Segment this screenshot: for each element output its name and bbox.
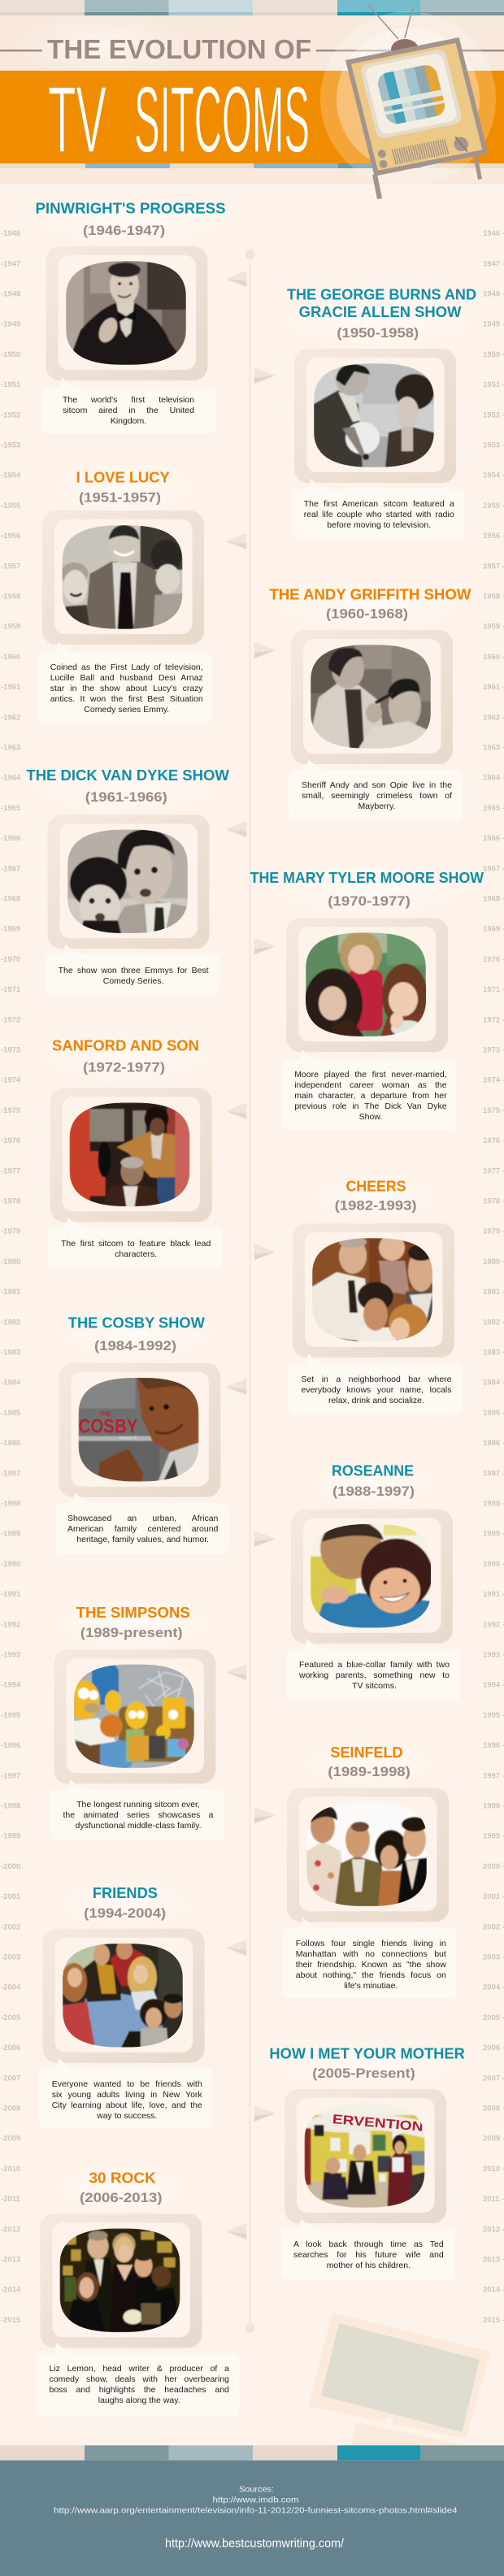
- caption: Roseanne: working parents, something new to: [299, 1670, 450, 1679]
- caption: Seinfeld: [283, 1928, 456, 1999]
- caption: Friends: Everyone wanted to be friends with: [52, 2079, 202, 2089]
- heading: The Dick Van Dyke Show: [26, 767, 229, 805]
- heading: The Andy Griffith Show: THE ANDY GRIFFITH SHOW: [269, 586, 471, 602]
- year ticks: left column: -1996: [1, 1741, 20, 1750]
- year ticks: left column: -1950: [1, 350, 20, 359]
- caption: 30 Rock: boss and highlights the headaches and: [49, 2385, 229, 2395]
- caption: The Simpsons: [50, 1790, 224, 1840]
- caption: Cheers: Set in a neighborhood bar where: [301, 1374, 452, 1384]
- year ticks: left column: -1999: [1, 1832, 20, 1841]
- caption: The Mary Tyler Moore Show: Show.: [359, 1112, 382, 1122]
- year ticks: left column: -1971: [1, 985, 21, 994]
- caption: The Dick Van Dyke Show: The show won three Emmys for Best: [59, 966, 209, 975]
- year ticks: left column: [1, 229, 21, 2325]
- year ticks: left column: -1963: [1, 743, 20, 753]
- caption: Friends: way to success.: [97, 2111, 157, 2121]
- caption: Cheers: [289, 1364, 462, 1415]
- year ticks: left column: -2001: [1, 1892, 21, 1901]
- caption: The Cosby Show: American family centered around: [67, 1524, 218, 1534]
- caption: Sanford and Son: [48, 1227, 222, 1268]
- panel: The Andy Griffith Show: [264, 580, 476, 820]
- caption: How I Met Your Mother: [281, 2229, 454, 2279]
- year ticks: left column: -1961: [1, 683, 21, 692]
- heading: How I Met Your Mother: [269, 2045, 465, 2081]
- heading: The Mary Tyler Moore Show: (1970-1977): [328, 893, 411, 909]
- caption: I Love Lucy: antics. It won the first Best Situation: [50, 694, 203, 704]
- caption: I Love Lucy: [39, 653, 211, 723]
- heading: How I Met Your Mother: HOW I MET YOUR MOTHER: [269, 2045, 465, 2061]
- photo: 30 Rock: [60, 2228, 180, 2332]
- caption: The Simpsons: dysfunctional middle-class family.: [75, 1821, 202, 1831]
- year ticks: left column: -2005: [1, 2013, 21, 2022]
- caption: I Love Lucy: Coined as the First Lady of television,: [50, 662, 203, 671]
- photo: George Burns and Gracie Allen: [314, 363, 434, 467]
- heading: How I Met Your Mother: (2005-Present): [312, 2066, 415, 2081]
- year ticks: left column: -1991: [1, 1590, 21, 1599]
- heading: The Cosby Show: [68, 1314, 205, 1353]
- year ticks: left column: -1953: [1, 441, 20, 450]
- heading: The Mary Tyler Moore Show: [250, 870, 484, 909]
- caption: Seinfeld: about nothing," the friends focus on: [296, 1970, 446, 1980]
- caption: Cheers: everybody knows your name, locals: [301, 1385, 452, 1395]
- year ticks: left column: -1997: [1, 1771, 20, 1780]
- year ticks: left column: -1975: [1, 1106, 21, 1115]
- year ticks: left column: -1954: [1, 471, 21, 480]
- year ticks: left column: -1982: [1, 1318, 20, 1327]
- heading: Roseanne: (1988-1997): [332, 1483, 415, 1499]
- caption: The Cosby Show: Showcased an urban, African: [67, 1514, 218, 1523]
- caption: The Dick Van Dyke Show: Comedy Series.: [103, 975, 163, 985]
- year ticks: left column: -1949: [1, 320, 20, 329]
- year ticks: left column: -2014: [1, 2286, 21, 2295]
- caption: Pinwright's Progress: Kingdom.: [111, 416, 146, 426]
- heading: Roseanne: [332, 1463, 415, 1499]
- caption: Sanford and Son: characters.: [115, 1249, 157, 1258]
- year ticks: left column: -1978: [1, 1197, 20, 1206]
- year ticks: left column: -1947: [1, 259, 20, 268]
- photo: The Cosby Show: COSBY: [78, 1416, 138, 1438]
- panel: 30 Rock: [37, 2162, 239, 2416]
- year ticks: left column: -1979: [1, 1227, 20, 1236]
- heading: Cheers: (1982-1993): [335, 1197, 417, 1213]
- year ticks: left column: -2004: [1, 1983, 21, 1992]
- year ticks: left column: -1995: [1, 1711, 21, 1720]
- year ticks: left column: -1957: [1, 562, 20, 571]
- year ticks: left column: -2008: [1, 2104, 20, 2113]
- year ticks: left column: -1983: [1, 1348, 20, 1358]
- year ticks: left column: -2015: [1, 2316, 21, 2325]
- header banner: [0, 0, 504, 185]
- year ticks: left column: -2009: [1, 2135, 20, 2144]
- heading: The Simpsons: (1989-present): [80, 1625, 183, 1640]
- caption: 30 Rock: laughs along the way.: [98, 2396, 180, 2405]
- caption: I Love Lucy: Lucille Ball and husband Desi Arnaz: [50, 673, 203, 683]
- heading: 30 Rock: [80, 2170, 163, 2205]
- heading: The Andy Griffith Show: (1960-1968): [326, 606, 408, 622]
- year ticks: right column: 2011 -: [483, 2195, 504, 2204]
- caption: I Love Lucy: Comedy series Emmy.: [84, 704, 169, 714]
- year ticks: left column: -1964: [1, 774, 21, 783]
- panel: Pinwright's Progress: [36, 203, 225, 433]
- year ticks: left column: -1956: [1, 532, 20, 541]
- year ticks: left column: -1960: [1, 653, 20, 662]
- caption: The Mary Tyler Moore Show: [283, 1060, 455, 1130]
- caption: George Burns and Gracie Allen: before moving to television.: [327, 520, 431, 530]
- year ticks: left column: -1973: [1, 1045, 20, 1055]
- heading: George Burns and Gracie Allen: (1950-1958): [337, 325, 419, 341]
- caption: Cheers: relax, drink and socialize.: [328, 1395, 424, 1405]
- year ticks: left column: -1998: [1, 1801, 20, 1811]
- heading: Roseanne: ROSEANNE: [332, 1463, 414, 1479]
- heading: Friends: [84, 1885, 166, 1921]
- year ticks: left column: -1952: [1, 411, 20, 419]
- heading: Sanford and Son: SANFORD AND SON: [52, 1038, 199, 1054]
- year ticks: left column: -2007: [1, 2074, 20, 2083]
- heading: Cheers: [335, 1178, 417, 1213]
- photo: Pinwright's Progress: [66, 261, 186, 365]
- year ticks: left column: -1976: [1, 1136, 20, 1145]
- sources: Sources:: [239, 2484, 274, 2494]
- caption: Pinwright's Progress: The world's first television: [63, 395, 194, 405]
- photo: The Dick Van Dyke Show: [67, 829, 188, 933]
- heading: I Love Lucy: I LOVE LUCY: [76, 469, 170, 485]
- heading: I Love Lucy: (1951-1957): [79, 489, 161, 505]
- year ticks: left column: -1970: [1, 955, 20, 964]
- photo: The Simpsons: [67, 1664, 194, 1768]
- caption: The Mary Tyler Moore Show: main character, a departure from her: [294, 1091, 447, 1101]
- caption: The Andy Griffith Show: small, seemingly crimeless town of: [302, 791, 452, 801]
- heading: I Love Lucy: [76, 469, 170, 505]
- year ticks: left column: -1986: [1, 1439, 20, 1448]
- caption: George Burns and Gracie Allen: The first American sitcom featured a: [304, 499, 454, 509]
- photo: How I Met Your Mother: [304, 2104, 424, 2208]
- timeline arrows: [226, 271, 276, 2239]
- panel: Sanford and Son: [49, 1040, 222, 1268]
- heading: Friends: (1994-2004): [84, 1905, 166, 1921]
- caption: Pinwright's Progress: [42, 388, 216, 433]
- heading: Seinfeld: (1989-1998): [328, 1764, 411, 1779]
- heading: Pinwright's Progress: [36, 201, 226, 238]
- heading: Friends: FRIENDS: [93, 1885, 158, 1901]
- photo: The Andy Griffith Show: [311, 645, 431, 749]
- heading: Sanford and Son: (1972-1977): [83, 1059, 165, 1075]
- year ticks: left column: -1977: [1, 1166, 20, 1175]
- panel: How I Met Your Mother: [270, 2048, 465, 2279]
- panel: The Dick Van Dyke Show: [20, 761, 232, 995]
- heading: The Cosby Show: (1984-1992): [94, 1338, 176, 1353]
- heading: The Mary Tyler Moore Show: THE MARY TYLER MOORE SHOW: [250, 870, 484, 886]
- caption: How I Met Your Mother: searches for his future wife and: [293, 2250, 444, 2260]
- caption: The Dick Van Dyke Show: [46, 954, 219, 995]
- year ticks: left column: -2012: [1, 2225, 20, 2234]
- caption: How I Met Your Mother: A look back through time as Ted: [293, 2239, 444, 2249]
- heading: 30 Rock: (2006-2013): [80, 2190, 163, 2205]
- heading: The Simpsons: [76, 1605, 190, 1640]
- caption: The Simpsons: The longest running sitcom ever,: [76, 1800, 200, 1809]
- caption: The Andy Griffith Show: Mayberry.: [358, 801, 395, 811]
- year ticks: left column: -1974: [1, 1076, 21, 1085]
- year ticks: left column: -2000: [1, 1862, 20, 1871]
- caption: 30 Rock: comedy show, deals with her overbearing: [49, 2374, 229, 2384]
- caption: The Simpsons: the animated series showcases a: [63, 1810, 213, 1820]
- heading: Seinfeld: SEINFELD: [330, 1744, 403, 1761]
- heading: George Burns and Gracie Allen: GRACIE ALLEN SHOW: [299, 304, 461, 320]
- caption: George Burns and Gracie Allen: real life couple who started with radio: [304, 510, 454, 519]
- year ticks: left column: -2013: [1, 2255, 20, 2265]
- photo: Friends: [61, 1940, 183, 2048]
- heading: The Dick Van Dyke Show: (1961-1966): [85, 789, 167, 805]
- year ticks: left column: -1967: [1, 864, 20, 873]
- panel: Roseanne: [287, 1457, 460, 1701]
- heading: George Burns and Gracie Allen: [287, 286, 476, 341]
- heading: Cheers: CHEERS: [346, 1178, 406, 1194]
- panel: Friends: [39, 1878, 212, 2128]
- year ticks: left column: -2010: [1, 2165, 20, 2174]
- caption: The Mary Tyler Moore Show: Moore played the first never-married,: [294, 1070, 447, 1079]
- photo: Sanford and Son: [70, 1102, 190, 1206]
- year ticks: left column: -2003: [1, 1953, 20, 1962]
- heading: The Andy Griffith Show: [269, 586, 471, 622]
- caption: The Andy Griffith Show: [289, 770, 463, 820]
- website url: http://www.bestcustomwriting.com/: [165, 2536, 345, 2551]
- photo: The Mary Tyler Moore Show: [304, 931, 428, 1040]
- caption: Seinfeld: life's minutiae.: [344, 1981, 398, 1991]
- caption: I Love Lucy: star in the show about Lucy's crazy: [50, 683, 203, 693]
- timeline spine: [245, 250, 255, 2333]
- caption: Seinfeld: their friendship. Known as "the show: [296, 1960, 446, 1970]
- caption: The Mary Tyler Moore Show: independent career woman as the: [294, 1080, 447, 1090]
- panel: Seinfeld: [283, 1736, 456, 1999]
- sources: http://www.aarp.org/entertainment/television/info-11-2012/20-funniest-sitcoms-photos.html#slide4: [54, 2505, 458, 2515]
- year ticks: left column: -1959: [1, 623, 20, 632]
- photo: The Cosby Show: THE: [99, 1412, 111, 1418]
- sources: http://www.imdb.com: [213, 2496, 299, 2505]
- caption: Friends: City learning about life, love, and the: [52, 2100, 202, 2110]
- year ticks: left column: -1972: [1, 1015, 20, 1024]
- photo: How I Met Your Mother: ERVENTION: [332, 2113, 424, 2135]
- caption: The Mary Tyler Moore Show: previous role in The Dick Van Dyke: [294, 1101, 447, 1111]
- year ticks: left column: -1966: [1, 834, 20, 843]
- year ticks: left column: -1985: [1, 1409, 21, 1418]
- caption: 30 Rock: [37, 2353, 239, 2416]
- photo: Roseanne: [311, 1518, 432, 1628]
- caption: Seinfeld: Follows four single friends living in: [296, 1939, 446, 1948]
- panel: Cheers: [289, 1171, 462, 1415]
- panel: The Simpsons: [46, 1596, 224, 1840]
- heading: Pinwright's Progress: (1946-1947): [83, 223, 165, 238]
- icon: ghost flat-screen television: [308, 2313, 491, 2447]
- caption: Pinwright's Progress: sitcom aired in the United: [63, 405, 194, 415]
- caption: Roseanne: Featured a blue-collar family with two: [299, 1660, 450, 1670]
- caption: 30 Rock: Liz Lemon, head writer & producer of a: [49, 2364, 229, 2374]
- year ticks: left column: -1969: [1, 925, 20, 934]
- heading: 30 Rock: 30 ROCK: [89, 2170, 156, 2186]
- heading: The Cosby Show: THE COSBY SHOW: [68, 1314, 205, 1331]
- year ticks: left column: -1968: [1, 894, 20, 904]
- year ticks: left column: -1987: [1, 1469, 20, 1478]
- year ticks: left column: -1946: [1, 229, 20, 238]
- year ticks: left column: -1994: [1, 1681, 21, 1690]
- panel: The Mary Tyler Moore Show: [250, 862, 484, 1130]
- caption: Friends: [39, 2069, 212, 2128]
- caption: Friends: six young adults living in New York: [52, 2090, 202, 2100]
- panel: I Love Lucy: [39, 462, 211, 723]
- heading: Sanford and Son: [52, 1038, 199, 1075]
- caption: The Andy Griffith Show: Sheriff Andy and son Opie live in the: [302, 780, 452, 790]
- year ticks: left column: -1958: [1, 592, 20, 602]
- title: tv sitcoms: [48, 67, 310, 172]
- year ticks: left column: -2002: [1, 1922, 20, 1931]
- year ticks: left column: -1992: [1, 1620, 20, 1629]
- heading: Seinfeld: [328, 1744, 411, 1779]
- caption: How I Met Your Mother: mother of his children.: [327, 2261, 411, 2270]
- year ticks: left column: -2011: [1, 2195, 20, 2204]
- year ticks: left column: -1989: [1, 1530, 20, 1539]
- year ticks: left column: -1981: [1, 1288, 21, 1297]
- footer panel: [0, 2461, 504, 2576]
- photo: The Cosby Show: [78, 1378, 198, 1482]
- heading: The Dick Van Dyke Show: THE DICK VAN DYKE SHOW: [26, 767, 229, 784]
- sources: [54, 2484, 458, 2515]
- caption: Roseanne: [287, 1649, 460, 1701]
- caption: Seinfeld: Manhattan with no connections but: [296, 1949, 446, 1959]
- caption: The Cosby Show: [55, 1503, 229, 1554]
- caption: Roseanne: TV sitcoms.: [352, 1681, 397, 1691]
- heading: George Burns and Gracie Allen: THE GEORGE BURNS AND: [287, 286, 476, 302]
- panel: The Cosby Show: [47, 1304, 229, 1554]
- photo: Seinfeld: [306, 1802, 428, 1906]
- year ticks: left column: -1993: [1, 1650, 20, 1660]
- year ticks: left column: -1980: [1, 1258, 20, 1266]
- year ticks: left column: -1962: [1, 713, 20, 722]
- title: the evolution of: THE EVOLUTION OF: [47, 34, 311, 64]
- year ticks: left column: -1951: [1, 380, 21, 389]
- year ticks: left column: -1955: [1, 502, 21, 510]
- panel: George Burns and Gracie Allen: [287, 289, 476, 539]
- caption: The Cosby Show: heritage, family values, and humor.: [76, 1535, 209, 1544]
- bottom colour strip: [0, 2445, 504, 2461]
- photo: Cheers: [312, 1235, 434, 1343]
- year ticks: left column: -1948: [1, 289, 20, 299]
- photo: I Love Lucy: [60, 525, 182, 629]
- year ticks: left column: -1990: [1, 1560, 20, 1569]
- icon: retro television: [320, 5, 496, 199]
- title rule lines: [0, 50, 504, 51]
- title: tv sitcoms: TV: [48, 67, 106, 172]
- heading: The Simpsons: THE SIMPSONS: [76, 1605, 190, 1621]
- year ticks: left column: -2006: [1, 2044, 20, 2053]
- caption: Sanford and Son: The first sitcom to feature black lead: [61, 1239, 211, 1249]
- photo: The Cosby Show: season 8: [119, 1436, 137, 1441]
- heading: Pinwright's Progress: PINWRIGHT'S PROGRESS: [36, 201, 226, 217]
- year ticks: left column: -1984: [1, 1379, 21, 1388]
- year ticks: right column: [483, 229, 504, 2325]
- year ticks: left column: -1988: [1, 1499, 20, 1509]
- year ticks: left column: -1965: [1, 804, 21, 813]
- caption: George Burns and Gracie Allen: [291, 489, 465, 539]
